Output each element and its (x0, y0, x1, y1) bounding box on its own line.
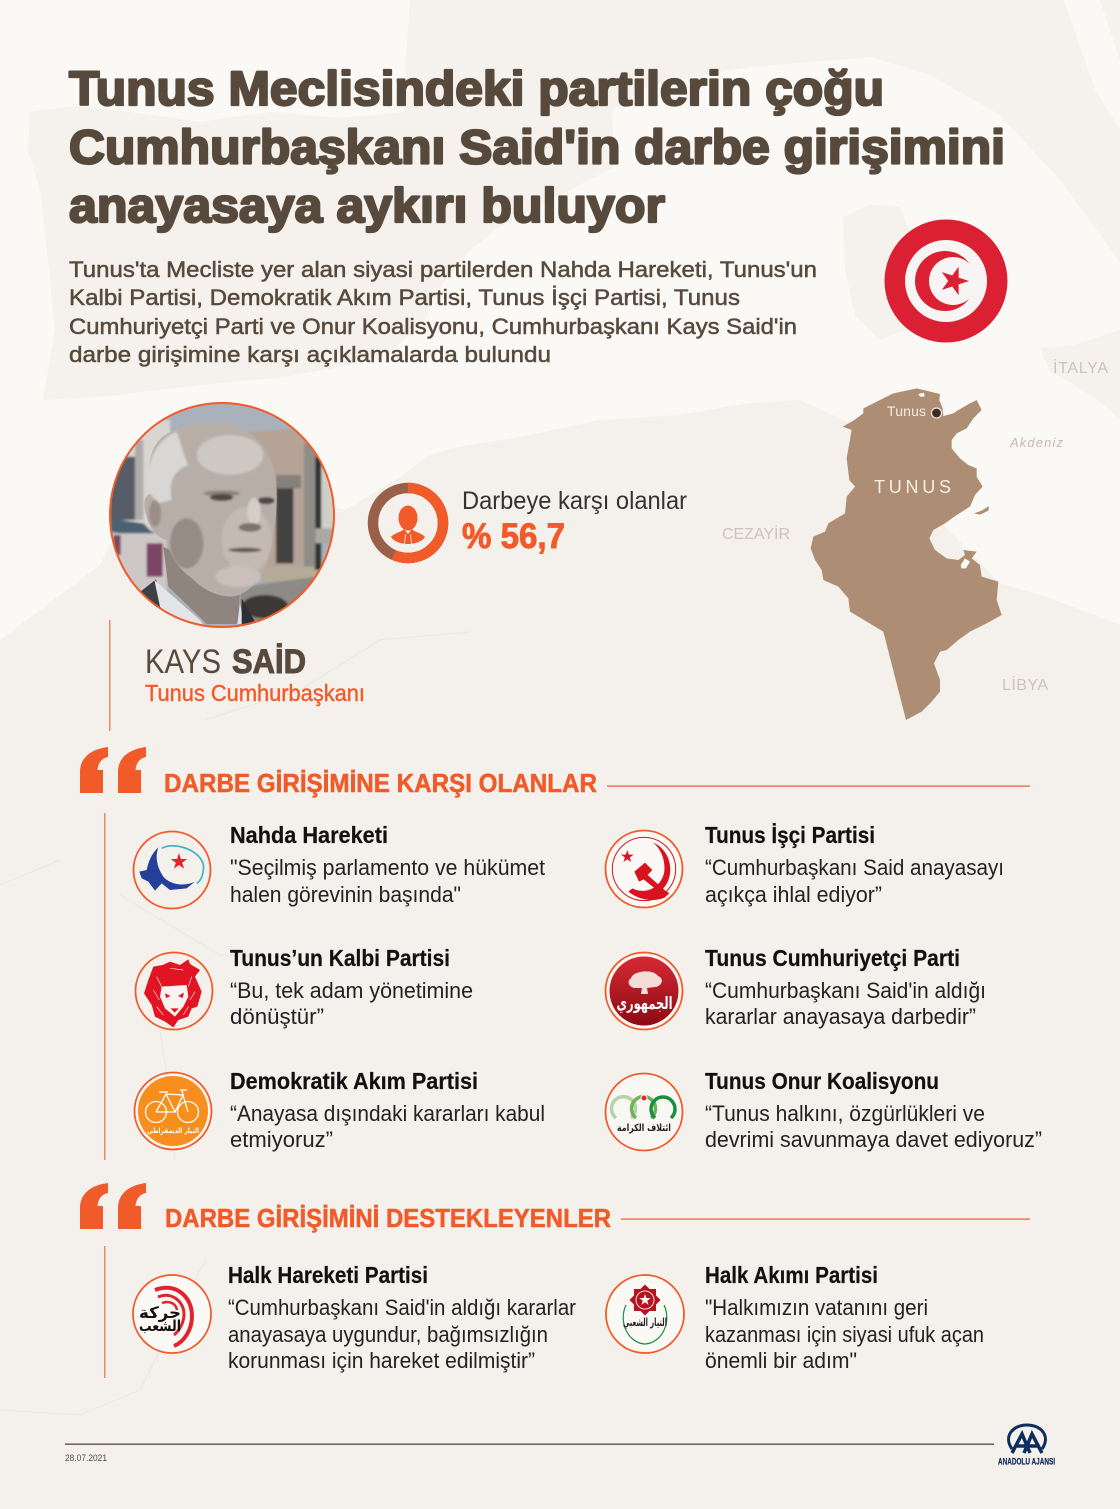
logo: Tayyar Shaabi (606, 1275, 684, 1353)
party: Halk Hareketi: Halk Hareketi Partisi (228, 1262, 428, 1288)
party: Tunus'un Kalbi: “Bu, tek adam yönetimine (230, 978, 473, 1003)
logo: Al Jumhuri: الجمهوري (616, 994, 672, 1014)
map labels: TUNUS (874, 477, 951, 497)
stat: opposed share (462, 487, 687, 556)
intro text (69, 257, 817, 367)
intro text: darbe girişimine karşı açıklamalarda bulundu (69, 342, 551, 367)
party: Tunus Cumhuriyetci: Tunus Cumhuriyetçi Parti (705, 945, 960, 971)
party: Tunus Cumhuriyetci: kararlar anayasaya darbedir” (705, 1004, 976, 1029)
logo: lion (136, 952, 212, 1030)
footer rule and date: 28.07.2021 (65, 1453, 107, 1463)
logo: Haraka al-Shaab: حركة (139, 1303, 181, 1322)
party: Tunus Cumhuriyetci (606, 945, 986, 1030)
party: Halk Hareketi (133, 1262, 576, 1373)
party: Tunus Onur Koalisyonu: Tunus Onur Koalisyonu (705, 1068, 939, 1094)
logo: hammer and sickle (606, 830, 682, 908)
quote mark: opposing section (80, 747, 146, 793)
map labels: İTALYA (1053, 358, 1108, 377)
icon: Tunisian flag (884, 220, 1008, 342)
logo: Nahda (134, 832, 210, 908)
party: Halk Akimi (606, 1262, 984, 1373)
photo: Kays Said portrait (107, 400, 340, 630)
party: Demokratik Akim (134, 1068, 545, 1152)
party: Tunus'un Kalbi (136, 945, 473, 1030)
party: Tunus Isci Partisi (606, 822, 1004, 908)
name: Kays Said: SAİD (232, 643, 306, 681)
name: Kays Said (145, 643, 365, 706)
party: Tunus Onur Koalisyonu: “Tunus halkını, özgürlükleri ve (705, 1101, 985, 1126)
party: Tunus Onur Koalisyonu: devrimi savunmaya davet ediyoruz” (705, 1127, 1042, 1152)
party: Halk Akimi: kazanması için siyasi ufuk açan (705, 1322, 984, 1347)
party: Tunus Isci Partisi: Tunus İşçi Partisi (705, 822, 875, 848)
party: Nahda: halen görevinin başında" (230, 882, 461, 907)
party: Halk Hareketi: “Cumhurbaşkanı Said'in aldığı kararlar (228, 1295, 576, 1320)
party: Halk Hareketi: korunması için hareket edilmiştir” (228, 1348, 535, 1373)
logo: Haraka al-Shaab (133, 1275, 211, 1353)
title: anayasaya aykırı buluyor (69, 180, 665, 233)
party: Nahda: "Seçilmiş parlamento ve hükümet (230, 855, 545, 880)
logo: bicycle (134, 1072, 212, 1150)
name: Kays Said: Tunus Cumhurbaşkanı (145, 680, 365, 706)
intro text: Kalbi Partisi, Demokratik Akım Partisi, Tunus İşçi Partisi, Tunus (69, 285, 740, 310)
logo: Al Jumhuri (606, 952, 682, 1030)
party: Demokratik Akim: “Anayasa dışındaki kararları kabul (230, 1101, 545, 1126)
party: Halk Akimi: "Halkımızın vatanını geri (705, 1295, 928, 1320)
intro text: Tunus'ta Mecliste yer alan siyasi partilerden Nahda Hareketi, Tunus'un (69, 257, 817, 282)
party: Nahda (134, 822, 545, 908)
logo: Karama coalition (606, 1074, 682, 1150)
stat: opposed share: % 56,7 (462, 517, 565, 556)
map labels: CEZAYİR (722, 524, 790, 543)
logo: Haraka al-Shaab: الشعب (139, 1317, 181, 1335)
heading: supporting section: DARBE GİRİŞİMİNİ DESTEKLEYENLER (165, 1203, 611, 1233)
party: Tunus'un Kalbi: dönüştür” (230, 1004, 324, 1029)
map labels: Akdeniz (1009, 435, 1064, 450)
map labels: LİBYA (1002, 675, 1048, 694)
party: Tunus Cumhuriyetci: “Cumhurbaşkanı Said'in aldığı (705, 978, 986, 1003)
logo: Tayyar Shaabi: التيار الشعبي (623, 1316, 667, 1329)
vertical connector: opposing section (104, 813, 106, 1160)
vertical connector: supporting section (104, 1246, 106, 1378)
heading: opposing section: DARBE GİRİŞİMİNE KARŞI OLANLAR (164, 768, 597, 798)
title: Tunus Meclisindeki partilerin çoğu (69, 63, 884, 116)
party: Halk Hareketi: anayasaya uygundur, bağımsızlığın (228, 1322, 548, 1347)
map labels: Tunus (887, 403, 926, 419)
party: Halk Akimi: önemli bir adım" (705, 1348, 857, 1373)
logo: Karama coalition: ائتلاف الكرامة (617, 1123, 671, 1134)
map of Tunisia (811, 388, 1002, 720)
donut chart: 56.7 percent (373, 488, 443, 558)
party: Tunus Onur Koalisyonu (606, 1068, 1042, 1152)
name: Kays Said: KAYS (145, 643, 221, 681)
title (69, 63, 1005, 233)
logo: Anadolu Ajansi (998, 1425, 1055, 1466)
quote mark: supporting section (80, 1183, 146, 1229)
party: Halk Akimi: Halk Akımı Partisi (705, 1262, 878, 1288)
party: Demokratik Akim: etmiyoruz” (230, 1127, 333, 1152)
party: Tunus Isci Partisi: açıkça ihlal ediyor” (705, 882, 882, 907)
party: Tunus Isci Partisi: “Cumhurbaşkanı Said anayasayı (705, 855, 1004, 880)
party: Tunus'un Kalbi: Tunus’un Kalbi Partisi (230, 945, 450, 971)
logo: Anadolu Ajansi: ANADOLU AJANSI (998, 1456, 1055, 1466)
party: Nahda: Nahda Hareketi (230, 822, 388, 848)
stat: opposed share: Darbeye karşı olanlar (462, 487, 687, 515)
map labels (722, 358, 1108, 694)
intro text: Cumhuriyetçi Parti ve Onur Koalisyonu, Cumhurbaşkanı Kays Said'in (69, 314, 797, 339)
vertical connector under portrait (109, 620, 110, 731)
logo: bicycle: التيار الديمقراطي (147, 1127, 199, 1135)
party: Demokratik Akim: Demokratik Akım Partisi (230, 1068, 478, 1094)
icon: person in suit (391, 506, 425, 544)
title: Cumhurbaşkanı Said'in darbe girişimini (69, 122, 1005, 174)
